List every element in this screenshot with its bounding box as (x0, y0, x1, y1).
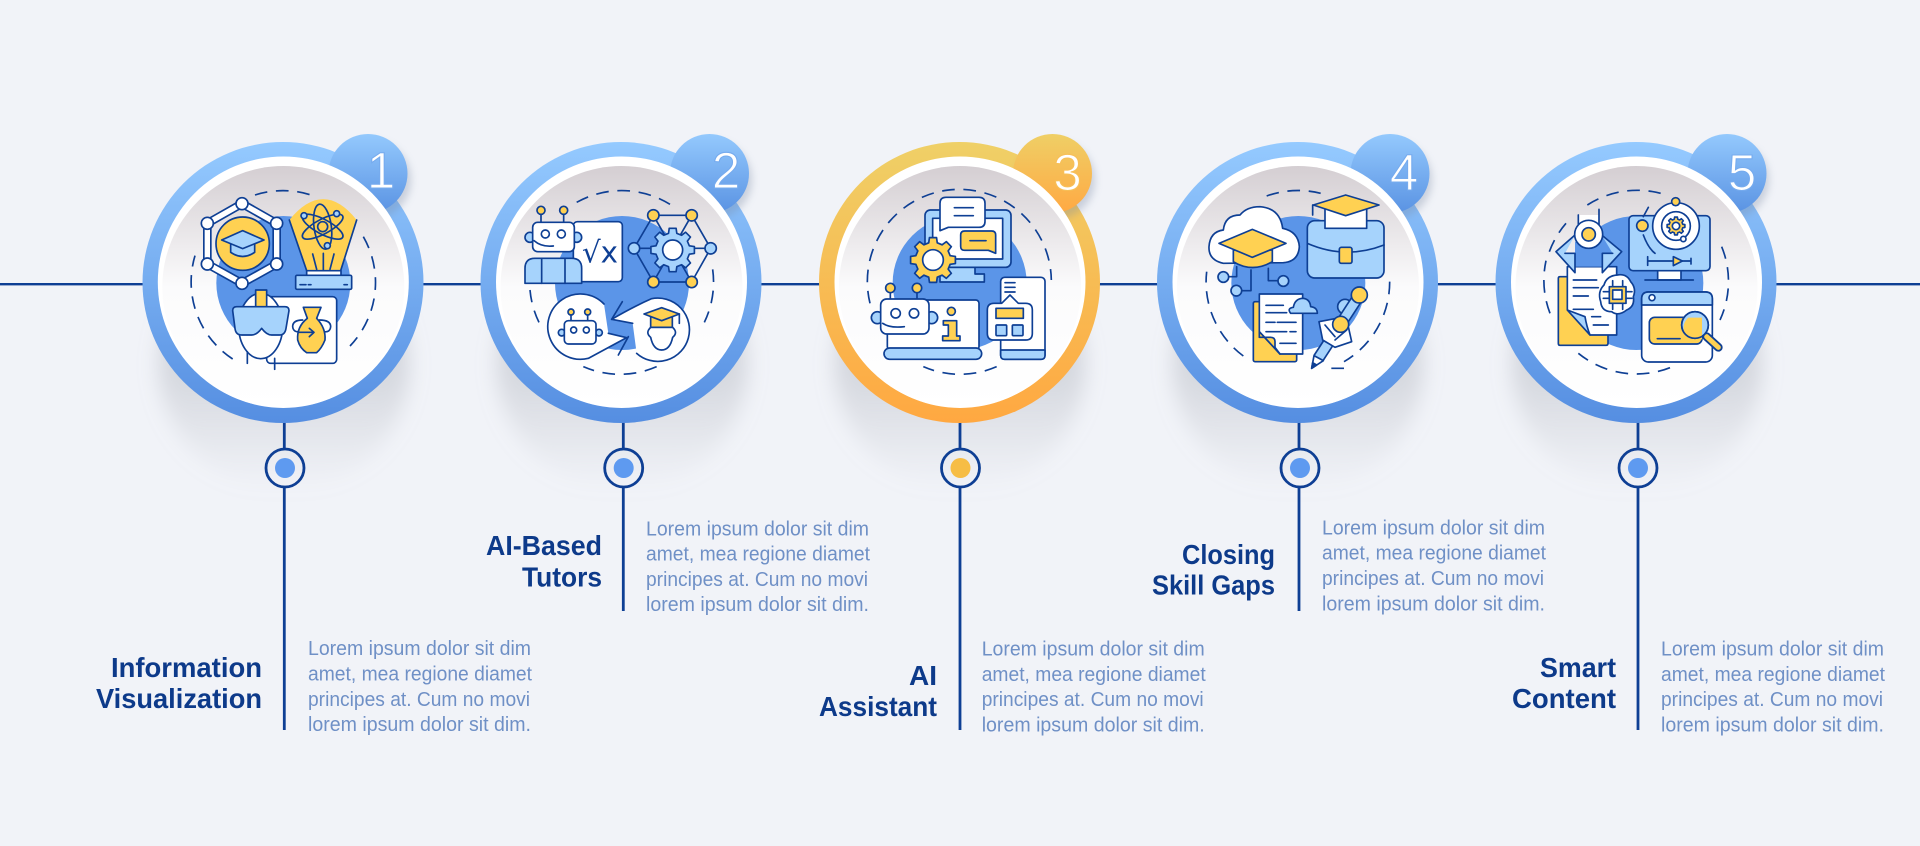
icon: closing skill gaps (1206, 190, 1390, 368)
heading 1: Information (111, 652, 262, 683)
heading 2: Tutors (522, 562, 602, 592)
panel: step 2 AI-Based Tutors (480, 134, 870, 616)
panel: step 4 Closing Skill Gaps (1152, 134, 1546, 615)
horizontal timeline (0, 283, 1920, 285)
panel: step 3 AI Assistant (819, 134, 1206, 736)
body text 3: Lorem ipsum dolor sit dim (982, 638, 1205, 660)
inner disc 2 (496, 156, 747, 408)
icon part: robot teacher with board (525, 206, 622, 283)
heading 4: Skill Gaps (1152, 570, 1275, 600)
body text 5: principes at. Cum no movi (1661, 689, 1883, 711)
body text 5: lorem ipsum dolor sit dim. (1661, 714, 1884, 736)
ring 1 (142, 142, 424, 423)
body text 1: Lorem ipsum dolor sit dim (308, 638, 531, 660)
body text 4: Lorem ipsum dolor sit dim (1322, 518, 1545, 540)
body text 1: lorem ipsum dolor sit dim. (308, 714, 531, 736)
heading 5: Content (1512, 683, 1616, 714)
ring 2 (480, 142, 762, 423)
heading 5 (1512, 652, 1616, 714)
icon part: document with cloud (1253, 294, 1317, 362)
body text 4: principes at. Cum no movi (1322, 568, 1544, 590)
number badge 5: 5 (1728, 144, 1756, 201)
node 2 (605, 449, 643, 487)
drop shadows under circles (159, 241, 1762, 491)
heading 1 (96, 652, 262, 714)
heading 2 (486, 530, 602, 592)
icon part: phone with card (987, 277, 1045, 359)
panel: step 1 Information Visualization (96, 134, 532, 736)
inner disc 5 (1511, 156, 1762, 408)
body text 3: amet, mea regione diamet (982, 664, 1206, 686)
body text 2: principes at. Cum no movi (646, 569, 868, 591)
node 4 (1281, 449, 1319, 487)
ring 3 (819, 142, 1100, 423)
node 5 (1619, 449, 1657, 487)
body text 4: lorem ipsum dolor sit dim. (1322, 593, 1545, 615)
icon part: pen tool (1312, 287, 1367, 368)
icon part: graduation network (201, 198, 283, 289)
ring 4 (1157, 142, 1438, 423)
connector line 4 (1298, 420, 1300, 611)
number badge 5 (1688, 134, 1769, 219)
connector line 5 (1637, 420, 1639, 730)
icon: information visualization (191, 191, 376, 369)
icon part: robot on laptop (871, 283, 982, 359)
number badge 2 (670, 134, 752, 219)
body text 3: principes at. Cum no movi (982, 689, 1204, 711)
inner disc 1 (158, 156, 409, 408)
icon part: robot teacher with board: √x (582, 236, 618, 270)
icon: AI-based tutors (525, 191, 716, 374)
icon part: monitor with chats and gear (911, 197, 1011, 282)
heading 3 (819, 660, 937, 722)
body text 4: amet, mea regione diamet (1322, 543, 1546, 565)
number badge 4 (1350, 134, 1432, 219)
body text 1: principes at. Cum no movi (308, 689, 530, 711)
body text 5: amet, mea regione diamet (1661, 664, 1885, 686)
body text 3: lorem ipsum dolor sit dim. (982, 714, 1205, 736)
connector line 3 (959, 420, 961, 730)
body text 1 (308, 638, 532, 736)
number badge 4: 4 (1390, 144, 1418, 201)
icon part: gear network (628, 210, 716, 288)
icon part: VR headset and vase (233, 290, 337, 369)
body text 4 (1322, 518, 1546, 615)
icon part: cloud with graduation cap (1209, 207, 1299, 296)
body text 2: lorem ipsum dolor sit dim. (646, 594, 869, 616)
number badge 1 (328, 134, 411, 219)
inner disc 3 (834, 156, 1086, 408)
heading 4 (1152, 539, 1275, 600)
body text 2 (646, 518, 870, 616)
heading 3: AI (909, 660, 937, 691)
heading 3: Assistant (819, 691, 937, 722)
body text 2: amet, mea regione diamet (646, 544, 870, 566)
number badge 3: 3 (1053, 144, 1082, 201)
icon part: briefcase with cap (1307, 195, 1384, 278)
icon part: atom hologram (289, 199, 357, 289)
ring 5 (1496, 142, 1776, 423)
connector line 1 (283, 420, 286, 730)
heading 5: Smart (1540, 652, 1616, 683)
number badge 1: 1 (367, 142, 395, 199)
body text 2: Lorem ipsum dolor sit dim (646, 518, 869, 540)
icon: smart content (1544, 190, 1728, 374)
icon part: robotic arm over document (1556, 209, 1635, 345)
heading 4: Closing (1182, 539, 1275, 570)
connector line 2 (622, 420, 625, 611)
heading 2: AI-Based (486, 530, 602, 561)
panel: step 5 Smart Content (1496, 134, 1885, 736)
icon part: monitor with video player (1629, 198, 1710, 280)
node 1 (266, 449, 304, 487)
inner disc 4 (1172, 156, 1424, 408)
body text 3 (982, 638, 1206, 736)
node 3 (942, 449, 980, 487)
number badge 3 (1013, 134, 1095, 219)
number badge 2: 2 (712, 142, 740, 199)
heading 1: Visualization (96, 683, 262, 714)
icon part: robot and student dialogue (548, 294, 689, 361)
body text 5: Lorem ipsum dolor sit dim (1661, 638, 1884, 660)
body text 1: amet, mea regione diamet (308, 664, 532, 686)
icon: AI assistant (867, 189, 1051, 374)
body text 5 (1661, 638, 1885, 736)
icon part: browser search window (1642, 292, 1718, 362)
